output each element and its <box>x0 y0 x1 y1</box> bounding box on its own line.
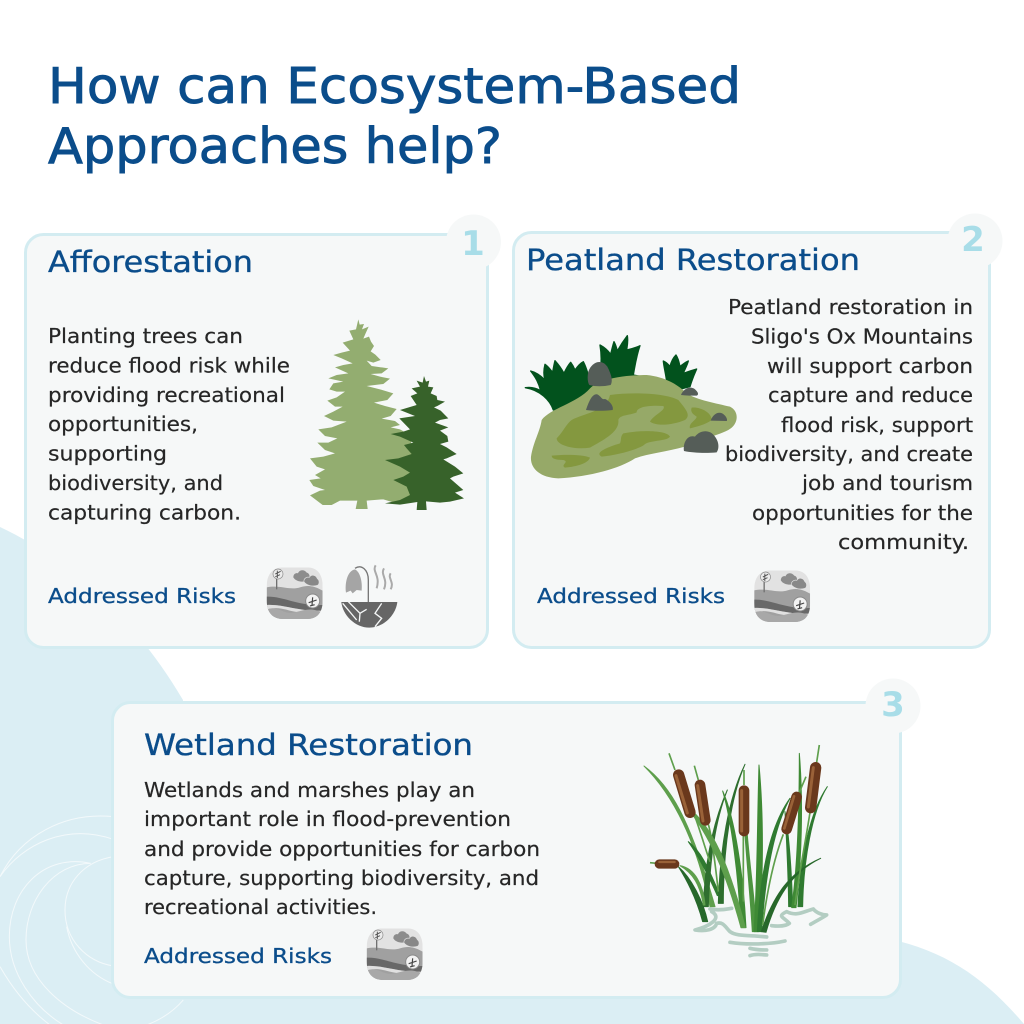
title <box>48 58 741 175</box>
heading: wetland restoration: Wetland Restoration <box>144 728 473 762</box>
card background <box>514 232 990 648</box>
body text: recreational activities. <box>144 895 377 919</box>
body text <box>144 778 540 919</box>
icon: drought risk <box>341 565 397 628</box>
icon: conifer trees <box>309 319 464 510</box>
icon: flood risk <box>367 928 423 980</box>
panel: wetland restoration <box>112 678 920 998</box>
label: addressed risks: Addressed Risks <box>537 584 725 608</box>
body text: Peatland restoration in <box>728 295 973 319</box>
body text: supporting <box>48 442 167 466</box>
body text: providing recreational <box>48 383 285 407</box>
background wave lines <box>0 816 183 1024</box>
icon: flood risk <box>267 567 323 619</box>
card background <box>26 234 488 648</box>
body text: biodiversity, and <box>48 471 223 495</box>
body text: reduce flood risk while <box>48 354 290 378</box>
number badge 1 <box>446 214 501 270</box>
panel: afforestation <box>26 214 501 648</box>
label: addressed risks: Addressed Risks <box>144 944 332 968</box>
body text: Wetlands and marshes play an <box>144 778 475 802</box>
title: How can Ecosystem-Based <box>48 58 741 115</box>
icon: flood risk <box>754 570 810 622</box>
body text: community. <box>838 530 969 554</box>
title: Approaches help? <box>48 118 502 175</box>
icon: peat bog <box>525 336 737 478</box>
number badge 2: 2 <box>961 220 985 260</box>
icon: cattails <box>644 745 827 956</box>
number badge 2 <box>948 214 1002 268</box>
body text: capture, supporting biodiversity, and <box>144 866 539 890</box>
number badge 1: 1 <box>461 224 485 264</box>
background blue shape <box>0 527 1024 1024</box>
body text: flood risk, support <box>781 413 973 437</box>
body text: capturing carbon. <box>48 500 241 524</box>
body text <box>725 295 973 554</box>
body text: capture and reduce <box>768 383 973 407</box>
panel: peatland restoration <box>514 214 1002 648</box>
body text: Sligo's Ox Mountains <box>751 324 973 348</box>
body text <box>48 324 290 524</box>
heading: afforestation: Afforestation <box>48 245 253 279</box>
card background <box>112 702 900 998</box>
body text: opportunities for the <box>752 501 973 525</box>
label: addressed risks: Addressed Risks <box>48 584 236 608</box>
heading: peatland restoration: Peatland Restoration <box>526 243 860 277</box>
body text: job and tourism <box>801 471 973 495</box>
body text: important role in flood-prevention <box>144 807 511 831</box>
number badge 3: 3 <box>881 685 905 725</box>
body text: will support carbon <box>767 354 973 378</box>
body text: and provide opportunities for carbon <box>144 837 540 861</box>
body text: opportunities, <box>48 412 198 436</box>
body text: biodiversity, and create <box>725 442 973 466</box>
number badge 3 <box>866 678 920 734</box>
body text: Planting trees can <box>48 324 243 348</box>
